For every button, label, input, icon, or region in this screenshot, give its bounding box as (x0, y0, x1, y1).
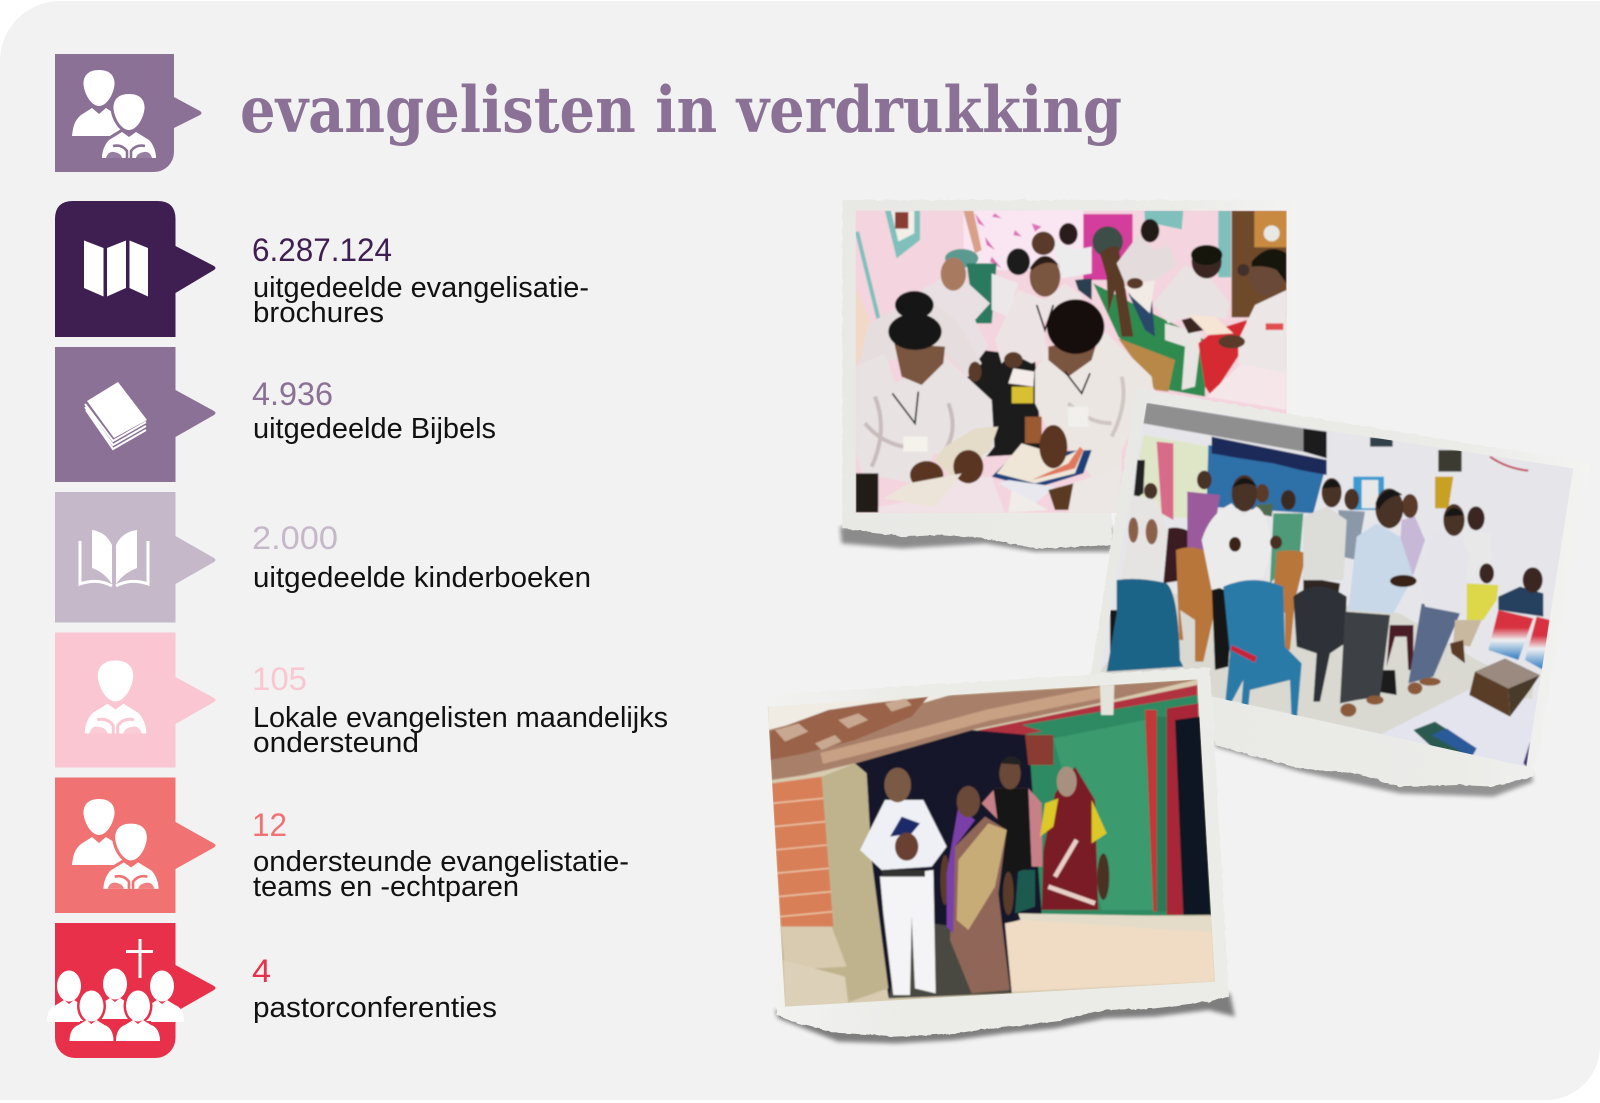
label: teams: ondersteunde evangelistatie- (253, 846, 629, 878)
row 3: children's books (55, 492, 591, 622)
icon: closed bible (55, 347, 216, 482)
label: teams (253, 846, 629, 903)
row 5: teams and couples (55, 778, 629, 913)
row 4: local evangelists (55, 632, 668, 768)
stat: 12: 12 (252, 807, 287, 843)
photo 2: congregation standing in worship (1090, 388, 1590, 797)
label: pastor conferences: pastorconferenties (253, 992, 497, 1024)
stat: 4: 4 (252, 953, 271, 989)
stat: 2.000: 2.000 (252, 520, 338, 556)
label: local evangelists: Lokale evangelisten maandelijks (253, 702, 668, 734)
stat: 105: 105 (252, 661, 307, 697)
title icon: evangelists (55, 54, 202, 172)
label: brochures (253, 272, 589, 329)
label: teams: teams en -echtparen (253, 871, 519, 903)
title: evangelisten in verdrukking (240, 73, 1122, 148)
photo 3: evangelist with family at home (762, 667, 1235, 1043)
photo 1: evangelists studying with bibles (840, 200, 1297, 552)
label: brochures: brochures (253, 297, 384, 329)
icon: map brochure (55, 201, 216, 337)
row 2: bibles (55, 347, 496, 482)
label: local evangelists (253, 702, 668, 759)
icon: two people (55, 778, 216, 913)
stat: 4.936: 4.936 (252, 376, 333, 412)
stat: 6.287.124: 6.287.124 (252, 232, 392, 268)
label: bibles: uitgedeelde Bijbels (253, 413, 496, 445)
label: children's books: uitgedeelde kinderboeken (253, 562, 591, 594)
label: local evangelists: ondersteund (253, 727, 419, 759)
row 1: brochures (55, 201, 589, 337)
icon: reader (55, 632, 216, 768)
label: brochures: uitgedeelde evangelisatie- (253, 272, 589, 304)
icon: congregation with cross (47, 923, 216, 1058)
icon: open book (55, 492, 216, 622)
row 6: pastor conferences (47, 923, 497, 1058)
